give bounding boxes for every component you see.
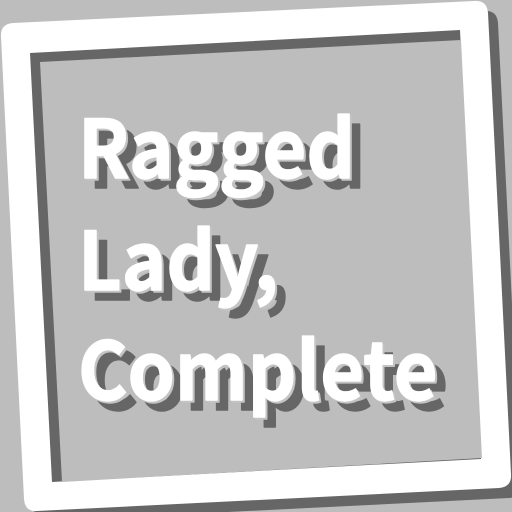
title shadow: Lady, <box>88 209 289 324</box>
title highlight fringe: Lady, <box>80 201 280 316</box>
title shadow: Complete <box>88 319 448 434</box>
title: Ragged <box>78 87 355 202</box>
inner panel <box>40 40 482 482</box>
title highlight fringe: Ragged <box>80 89 357 204</box>
title: Complete <box>78 309 438 424</box>
title shadow: Ragged <box>88 97 366 212</box>
title highlight fringe: Complete <box>80 311 440 426</box>
title shadow <box>88 97 448 434</box>
title: Lady, <box>78 199 278 314</box>
title highlight fringe <box>80 89 440 426</box>
inner panel dark edge <box>30 30 481 482</box>
title <box>78 87 438 424</box>
